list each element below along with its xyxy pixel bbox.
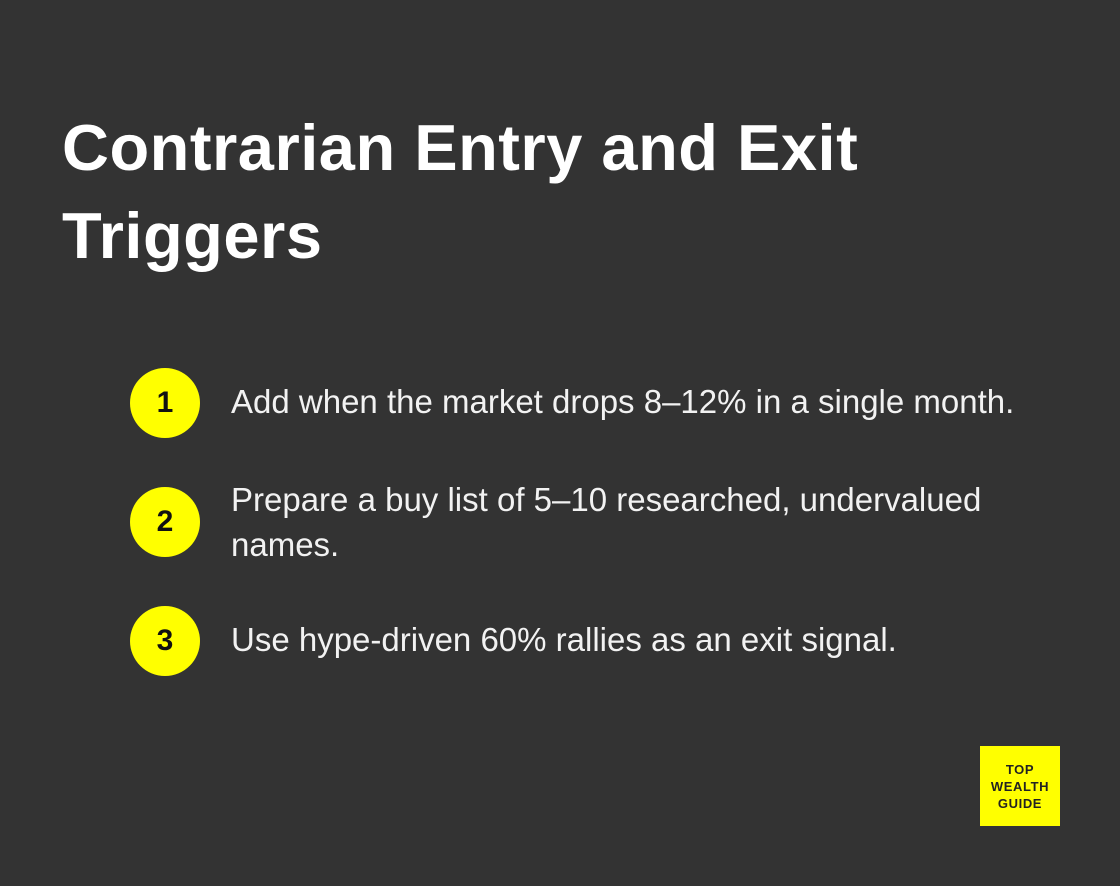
logo: TOP [1006, 762, 1034, 776]
logo [980, 746, 1060, 826]
number badge 3 [130, 606, 200, 676]
title: Triggers [62, 199, 322, 272]
title [62, 111, 858, 272]
number badge 3: 3 [157, 624, 173, 657]
text 1: Add when the market drops 8–12% in a single month. [231, 383, 1014, 420]
logo: GUIDE [998, 796, 1042, 810]
number badge 1: 1 [157, 386, 173, 419]
number badge 2 [130, 487, 200, 557]
logo: WEALTH [991, 778, 1049, 794]
number badge 2: 2 [157, 505, 173, 538]
item 1 [130, 368, 1014, 438]
text 3: Use hype-driven 60% rallies as an exit signal. [231, 621, 897, 658]
item 2 [130, 481, 981, 563]
title: Contrarian Entry and Exit [62, 111, 858, 184]
item 3 [130, 606, 897, 676]
number badge 1 [130, 368, 200, 438]
text 2: Prepare a buy list of 5–10 researched, undervalued names. [231, 481, 981, 563]
